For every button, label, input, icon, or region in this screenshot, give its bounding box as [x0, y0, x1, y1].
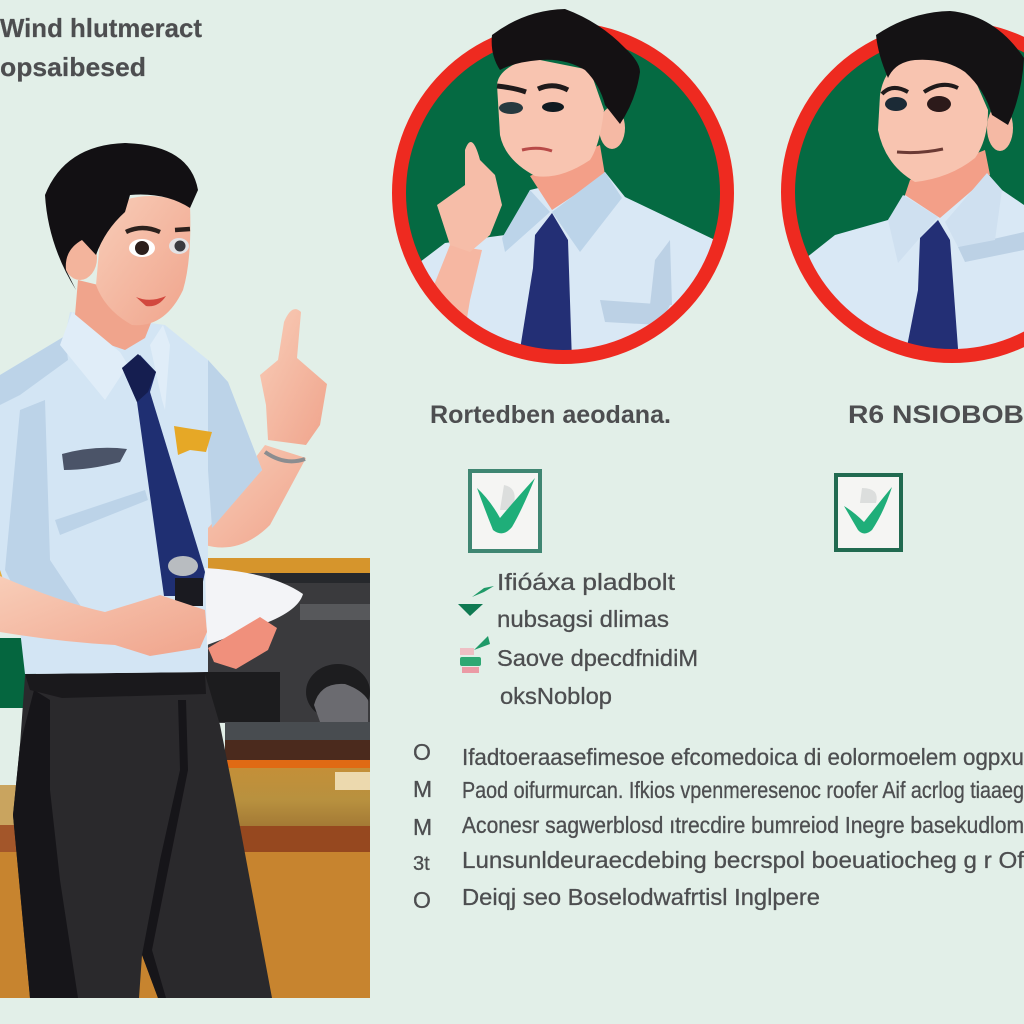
shirt shading — [958, 232, 1024, 262]
tie knot — [122, 354, 156, 402]
list lines — [462, 744, 1024, 910]
paper — [205, 568, 303, 645]
tie — [122, 355, 205, 596]
hair — [492, 9, 640, 124]
waistband — [25, 672, 206, 698]
right forearm — [205, 445, 306, 548]
shirt — [0, 312, 262, 674]
mouth — [136, 296, 166, 306]
hair — [876, 11, 1024, 125]
trouser folds — [13, 690, 188, 998]
list markers: 3t — [413, 853, 430, 875]
checkbox left — [470, 471, 540, 551]
trousers — [13, 674, 272, 998]
list lines: Lunsunldeuraecdebing becrspol boeuatiocheg ɡ r Of — [462, 847, 1024, 873]
tie — [520, 213, 572, 350]
raised hand — [260, 309, 327, 445]
collar — [60, 312, 128, 400]
checklist text: oksNoblop — [500, 683, 612, 709]
green disc — [788, 28, 1024, 356]
neck — [75, 280, 160, 350]
checklist text: Saove dpecdfnidiM — [497, 645, 698, 671]
mouth — [522, 148, 552, 151]
checkbox right — [836, 475, 901, 550]
face — [497, 58, 604, 177]
shirt shading — [0, 336, 262, 620]
microphone — [168, 556, 203, 606]
wristband — [265, 452, 305, 461]
eyes and brows — [882, 85, 958, 112]
numbered details list — [413, 739, 1024, 913]
ear — [63, 236, 97, 280]
checklist text: Ifióáxa pladbolt — [497, 569, 676, 595]
checklist text — [497, 569, 698, 709]
title text: opsaibesed — [0, 52, 146, 82]
neck — [905, 150, 990, 218]
shirt — [808, 176, 1024, 349]
small list icons — [458, 586, 494, 673]
shirt — [422, 172, 713, 350]
list lines: Ifadtoeraasefimesoe efcomedoica di eolormoelem ogpxu — [462, 744, 1024, 770]
eyes and brows — [497, 86, 568, 114]
portrait circle 2 — [788, 11, 1024, 370]
ear — [599, 107, 625, 149]
ear — [987, 105, 1013, 151]
list markers: O — [413, 887, 431, 913]
title text — [0, 13, 202, 82]
desk and background scene — [0, 515, 370, 998]
list lines: Deiqj seo Boselodwafrtisl Inglpere — [462, 884, 820, 910]
pin badge — [174, 426, 212, 455]
forearm — [434, 245, 482, 318]
shirt shading — [600, 240, 672, 325]
mouth — [897, 149, 943, 153]
portrait circle 1 — [399, 9, 727, 370]
face — [878, 58, 988, 182]
caption right: R6 NSIOBOB — [848, 401, 1024, 429]
green disc — [399, 29, 727, 357]
collar — [888, 173, 1002, 263]
hair — [45, 143, 198, 290]
collar — [502, 172, 622, 252]
main figure: uniformed man — [0, 143, 327, 998]
red ring — [788, 28, 1024, 356]
checklist text: nubsagsi dlimas — [497, 606, 669, 632]
shirt and tie group — [422, 172, 713, 350]
shirt pocket flap — [62, 448, 127, 470]
second hand — [208, 617, 277, 669]
left arm and hand — [0, 576, 207, 656]
raised hand — [437, 142, 502, 252]
shirt and tie group — [808, 176, 1024, 349]
list markers: O — [413, 739, 431, 765]
title text: Wind hlutmeract — [0, 13, 202, 43]
eyes and brows — [126, 228, 190, 257]
tie — [908, 220, 958, 349]
neck — [530, 145, 605, 210]
caption left: Rortedben aeodana. — [430, 401, 671, 429]
red ring — [399, 29, 727, 357]
list markers: M — [413, 814, 432, 840]
list markers — [413, 739, 432, 913]
face — [96, 196, 190, 325]
list markers: M — [413, 776, 432, 802]
